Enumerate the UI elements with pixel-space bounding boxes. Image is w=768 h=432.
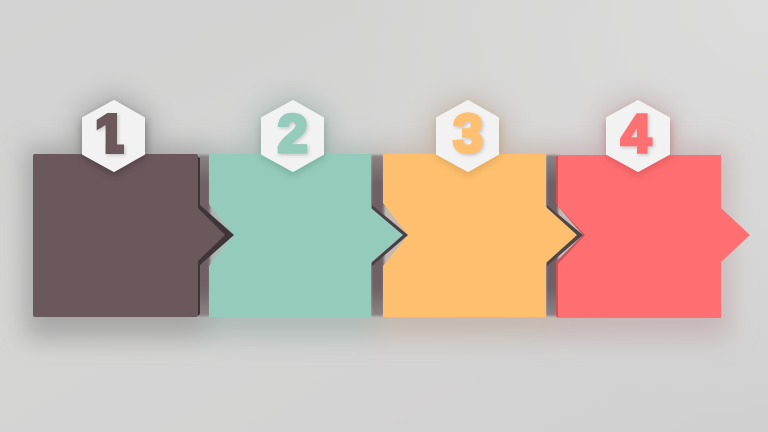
panel 4: red arrow — [556, 155, 750, 318]
panel 1: brown arrow — [33, 154, 234, 317]
gap shadows — [198, 155, 558, 316]
soft ambient shadows — [26, 146, 730, 338]
panel 2: teal arrow — [209, 154, 408, 317]
hexagon ambient shadows — [76, 92, 676, 160]
badge 1: 1 — [95, 104, 125, 164]
panel 3 notch shadow — [547, 205, 583, 266]
panel 1 face — [33, 154, 198, 317]
panel 1 dark edge — [198, 157, 234, 316]
panel 2 notch shadow — [372, 205, 408, 266]
infographic: four numbered arrow steps — [8, 82, 750, 354]
panel 4 face — [558, 155, 750, 318]
panel 3 face — [383, 154, 577, 317]
badge 3 — [437, 101, 498, 171]
panel 4 side edge — [556, 155, 721, 318]
badge 2: 2 — [277, 104, 308, 164]
panel 3: orange arrow — [383, 154, 583, 317]
badge 3: 3 — [453, 104, 483, 164]
badge 4 — [607, 101, 669, 171]
badge 4: 4 — [621, 104, 651, 164]
badge 1 — [83, 101, 144, 171]
badge 2 — [262, 101, 323, 171]
panel 2 face — [209, 154, 403, 317]
hexagon contact shadows — [82, 103, 671, 176]
